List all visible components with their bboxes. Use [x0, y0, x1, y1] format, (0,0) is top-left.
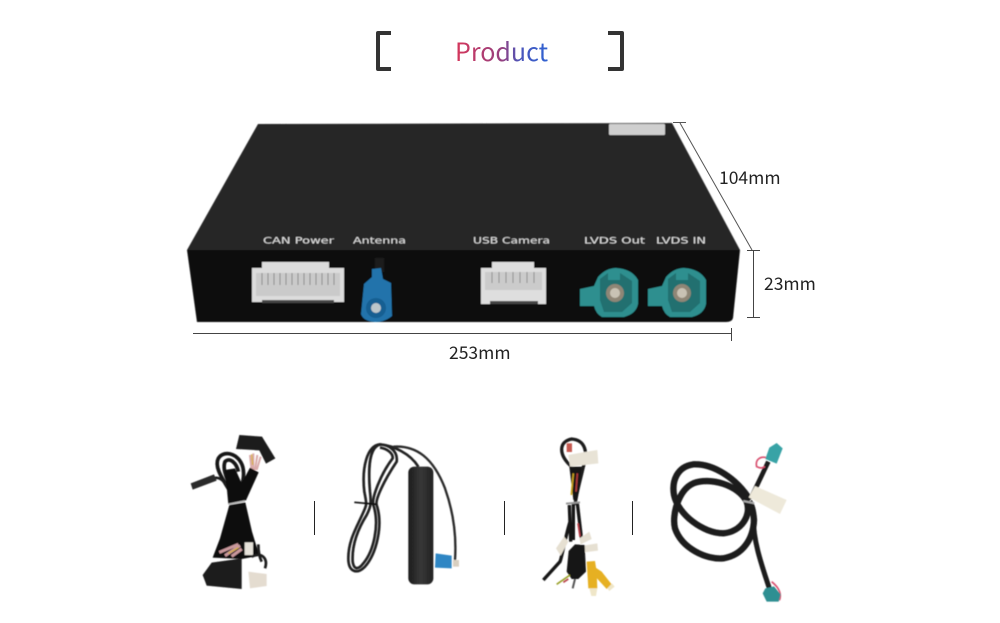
coiled cable strands [348, 444, 418, 571]
cable tie [566, 502, 580, 504]
dimension: width 253mm [193, 328, 732, 365]
second lead [393, 447, 455, 560]
accessory: USB camera harness [543, 439, 615, 596]
right side lead [252, 544, 266, 568]
CAN Power port label: CAN Power [263, 236, 334, 246]
sleeved cable loops [673, 464, 754, 558]
white plug [248, 572, 267, 588]
pink wire [756, 457, 768, 468]
CAN Power connector [252, 262, 344, 303]
divider 3 [632, 501, 633, 535]
red lead [578, 523, 580, 537]
USB Camera connector [481, 262, 546, 304]
top wire loop [562, 439, 586, 505]
accessory: CAN power harness [191, 435, 275, 589]
Antenna port label: Antenna [353, 236, 406, 246]
top connector [236, 435, 275, 464]
accessory: LVDS cable [673, 443, 787, 602]
audio jack [191, 474, 217, 490]
LVDS Out port label: LVDS Out [584, 236, 646, 246]
bottom teal connector [763, 586, 781, 602]
antenna body [408, 467, 433, 584]
divider 2 [504, 501, 505, 535]
black loop cables [217, 454, 244, 500]
cable tie [228, 501, 245, 504]
wire bundle [543, 503, 582, 580]
top teal connector [765, 443, 783, 464]
USB Camera port label: USB Camera [473, 236, 550, 246]
main product: black interface box [187, 123, 740, 322]
upper lead [752, 462, 768, 497]
white micro plug [453, 560, 459, 567]
braided lower trunk [213, 502, 259, 559]
accessory: antenna with cable [348, 444, 459, 584]
LVDS IN port label: LVDS IN [656, 236, 706, 246]
yellow RCA plugs [587, 561, 597, 588]
width value: 253mm [449, 340, 511, 365]
black module [567, 544, 586, 579]
box top face [187, 123, 740, 250]
height value: 23mm [764, 271, 816, 296]
lower lead [753, 518, 769, 588]
pink wire lower [772, 582, 780, 600]
bottom connector [203, 558, 242, 589]
paper label [749, 486, 787, 514]
dimension: height 23mm [747, 250, 816, 318]
cable tie [354, 502, 377, 504]
dimension: depth 104mm [673, 122, 781, 250]
sticker on top [609, 124, 665, 135]
white tags [556, 532, 598, 556]
braided upper trunk [225, 468, 259, 504]
jack lead [213, 478, 233, 500]
lower coloured wires [219, 544, 242, 556]
left bracket [378, 33, 391, 69]
sleeve stub [569, 467, 582, 500]
right bracket [608, 33, 622, 69]
coloured wires [571, 473, 573, 495]
divider 1 [314, 501, 315, 535]
thin end wires [557, 575, 570, 584]
section heading: Product [378, 33, 622, 69]
box front face [187, 250, 740, 322]
LVDS Out connector [580, 268, 638, 317]
white tag [245, 542, 253, 555]
upper coloured wires [250, 453, 261, 470]
red plug [567, 443, 572, 452]
antenna connector [361, 258, 392, 322]
blue connector [435, 553, 452, 568]
title text: Product [455, 33, 549, 69]
cable tie [743, 501, 754, 503]
paper tags [568, 450, 598, 467]
depth value: 104mm [719, 165, 781, 190]
RCA tips [589, 583, 615, 596]
LVDS IN connector [648, 268, 706, 317]
